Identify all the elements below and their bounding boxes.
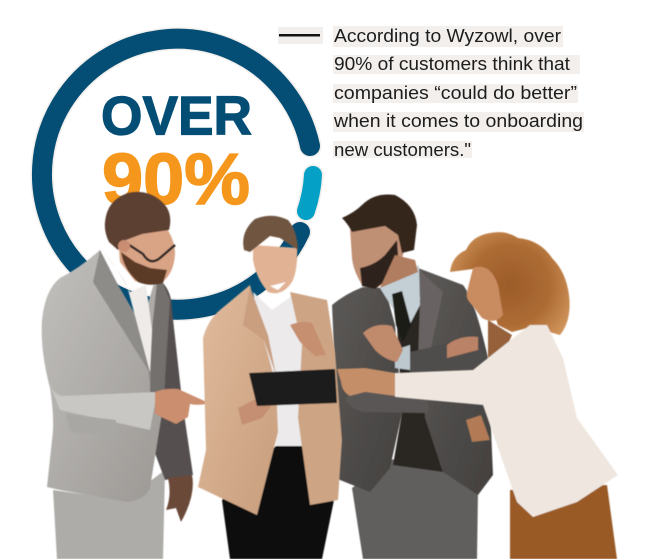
lapel <box>243 287 276 375</box>
head <box>243 216 298 293</box>
body text: new customers." <box>334 140 471 160</box>
progress ring <box>42 39 313 310</box>
person: man in grey suit <box>42 192 209 559</box>
hidden hand <box>466 415 490 442</box>
shirt <box>102 250 152 372</box>
person: woman in tan blazer <box>198 216 342 559</box>
hands <box>290 322 326 356</box>
body text: companies “could do better” <box>334 83 577 103</box>
glasses <box>123 241 175 261</box>
tablet <box>249 369 337 406</box>
person: woman in white blazer <box>337 232 618 559</box>
pointing hand <box>337 368 395 396</box>
blazer right front <box>290 292 342 505</box>
trousers <box>53 470 165 559</box>
trousers <box>222 445 334 559</box>
vest <box>393 300 443 472</box>
jacket right front <box>418 268 493 495</box>
shirt <box>253 292 302 446</box>
body text: 90% of customers think that <box>334 54 570 74</box>
trousers <box>510 485 617 559</box>
shirt and tie <box>380 265 420 328</box>
hair <box>450 232 570 335</box>
headline: over 90%: 90% <box>102 140 250 220</box>
accent dash <box>278 27 323 44</box>
body text <box>333 26 584 160</box>
jacket <box>42 250 168 502</box>
face <box>467 267 503 321</box>
body text: According to Wyzowl, over <box>334 26 561 46</box>
head <box>105 192 175 285</box>
headline: over 90% <box>101 84 252 220</box>
neck and top <box>488 320 512 362</box>
person: man in dark suit <box>332 194 493 559</box>
sleeve <box>345 380 428 413</box>
hands <box>363 325 403 362</box>
pointing hand <box>155 389 209 424</box>
blazer left front <box>198 285 278 515</box>
headline: over 90%: OVER <box>101 84 252 146</box>
jacket left front <box>332 287 402 492</box>
body text: when it comes to onboarding <box>333 111 583 131</box>
far arm and hand <box>150 282 193 522</box>
blazer <box>395 325 618 517</box>
trousers <box>352 455 478 559</box>
head <box>342 194 418 289</box>
lapel <box>417 268 443 362</box>
